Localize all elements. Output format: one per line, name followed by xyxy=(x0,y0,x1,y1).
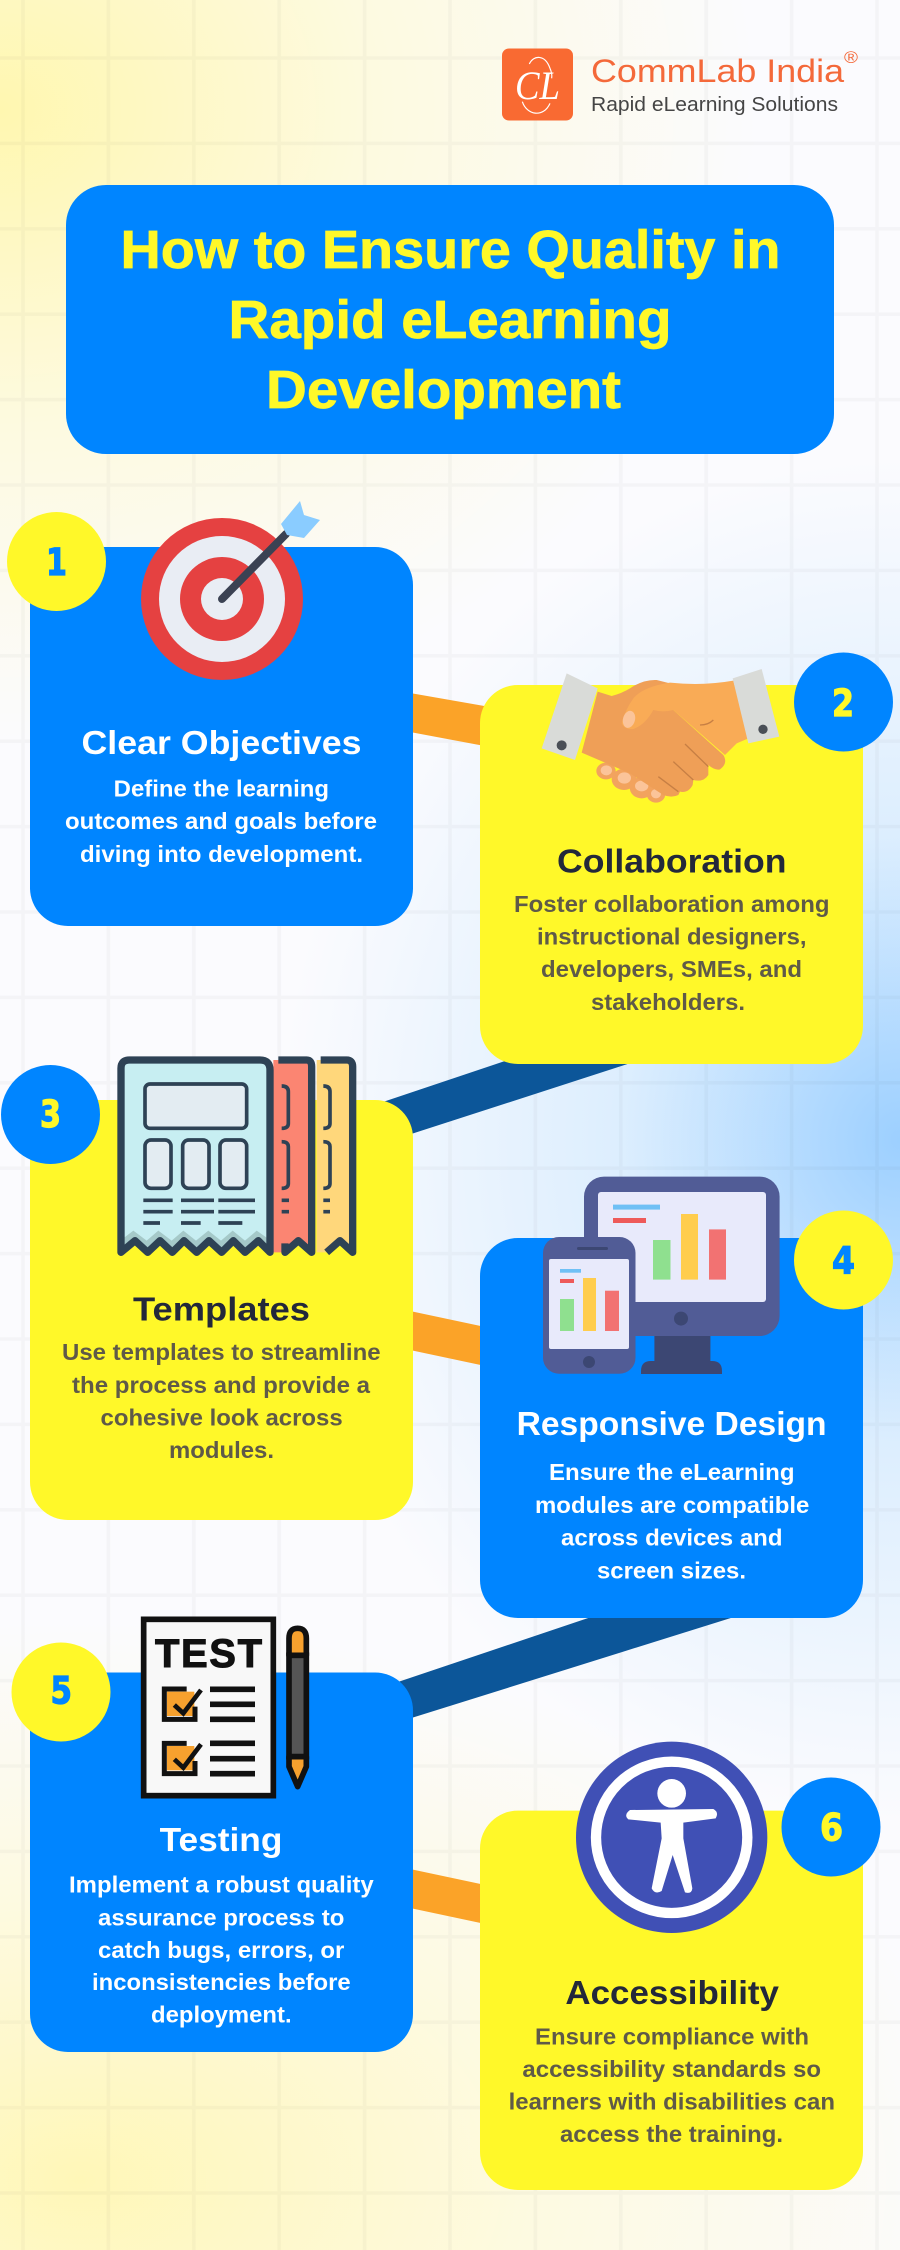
connector: 5 to 6 xyxy=(410,1869,490,1925)
connector: 4 to 5 xyxy=(392,1612,750,1720)
description: catch bugs, errors, or xyxy=(98,1937,344,1963)
card 6 background xyxy=(480,1811,863,2190)
badge 6 xyxy=(782,1778,880,1876)
panel: clear objectives xyxy=(30,501,413,926)
description: Ensure compliance with xyxy=(535,2023,809,2049)
badge 4: 4 xyxy=(832,1240,855,1282)
description xyxy=(535,1459,809,1584)
icon: handshake xyxy=(542,669,779,803)
badge 3 xyxy=(1,1065,100,1164)
description: Use templates to streamline xyxy=(62,1339,381,1365)
icon: accessibility figure xyxy=(576,1742,767,1933)
title xyxy=(120,220,781,420)
description: the process and provide a xyxy=(72,1372,370,1398)
badge 3: 3 xyxy=(40,1093,61,1136)
description: modules are compatible xyxy=(535,1492,809,1518)
heading: Accessibility xyxy=(565,1974,780,2011)
description: diving into development. xyxy=(80,841,363,867)
panel: responsive design xyxy=(480,1177,863,1618)
description: assurance process to xyxy=(98,1904,344,1930)
badge 5: 5 xyxy=(50,1670,72,1713)
description: Foster collaboration among xyxy=(514,891,830,917)
heading: Responsive Design xyxy=(517,1405,827,1442)
description: learners with disabilities can xyxy=(509,2088,835,2114)
description: across devices and xyxy=(561,1524,782,1550)
description xyxy=(509,2023,835,2147)
title panel xyxy=(66,185,834,454)
description xyxy=(65,776,377,867)
icon: template sheets xyxy=(121,1060,353,1252)
description: accessibility standards so xyxy=(522,2056,821,2082)
panel: templates xyxy=(30,1060,413,1520)
logo mark xyxy=(502,48,573,120)
heading: Collaboration xyxy=(557,843,786,880)
badge 6: 6 xyxy=(820,1806,843,1850)
card 3 background xyxy=(30,1100,413,1520)
description: developers, SMEs, and xyxy=(541,956,802,982)
title: Development xyxy=(266,360,621,420)
connector: 3 to 4 xyxy=(410,1311,490,1367)
description: instructional designers, xyxy=(537,924,806,950)
description xyxy=(62,1339,381,1463)
title background xyxy=(66,185,834,454)
description: access the training. xyxy=(560,2121,783,2147)
description xyxy=(514,891,830,1015)
panel: testing xyxy=(30,1619,413,2052)
card 2 background xyxy=(480,685,863,1064)
description: Implement a robust quality xyxy=(69,1872,374,1898)
description: inconsistencies before xyxy=(92,1969,351,1995)
logo mark: CL xyxy=(515,63,560,108)
badge 1 xyxy=(7,512,106,611)
logo: CommLab India xyxy=(502,48,859,120)
title: How to Ensure Quality in xyxy=(120,220,781,280)
description xyxy=(69,1872,374,2028)
connector: 2 to 3 xyxy=(380,1060,640,1136)
description: modules. xyxy=(169,1437,274,1463)
icon: monitor and phone xyxy=(543,1177,780,1374)
card 5 background xyxy=(30,1672,413,2052)
connector: 1 to 2 xyxy=(410,693,490,747)
description: Ensure the eLearning xyxy=(549,1459,794,1485)
icon: target with arrow xyxy=(141,501,320,680)
icon: test sheet and pencil: TEST xyxy=(155,1632,262,1676)
description: outcomes and goals before xyxy=(65,808,377,834)
heading: Templates xyxy=(133,1290,310,1328)
logo name: CommLab India xyxy=(591,53,844,89)
badge 2 xyxy=(794,652,893,752)
icon: test sheet and pencil xyxy=(144,1619,306,1796)
description: Define the learning xyxy=(114,776,329,802)
logo tagline: Rapid eLearning Solutions xyxy=(591,94,838,116)
heading: Clear Objectives xyxy=(82,724,362,761)
description: screen sizes. xyxy=(597,1558,746,1584)
panel: accessibility xyxy=(480,1742,863,2190)
card 4 background xyxy=(480,1238,863,1618)
registered mark: ® xyxy=(844,48,859,67)
badge 5 xyxy=(12,1642,110,1742)
description: stakeholders. xyxy=(591,989,745,1015)
description: cohesive look across xyxy=(100,1404,343,1430)
panel: collaboration xyxy=(480,669,863,1064)
badge 1: 1 xyxy=(46,541,67,584)
card 1 background xyxy=(30,547,413,926)
title: Rapid eLearning xyxy=(228,290,672,350)
heading: Testing xyxy=(160,1821,282,1858)
description: deployment. xyxy=(151,2002,292,2028)
badge 4 xyxy=(794,1210,893,1310)
badge 2: 2 xyxy=(832,682,854,725)
